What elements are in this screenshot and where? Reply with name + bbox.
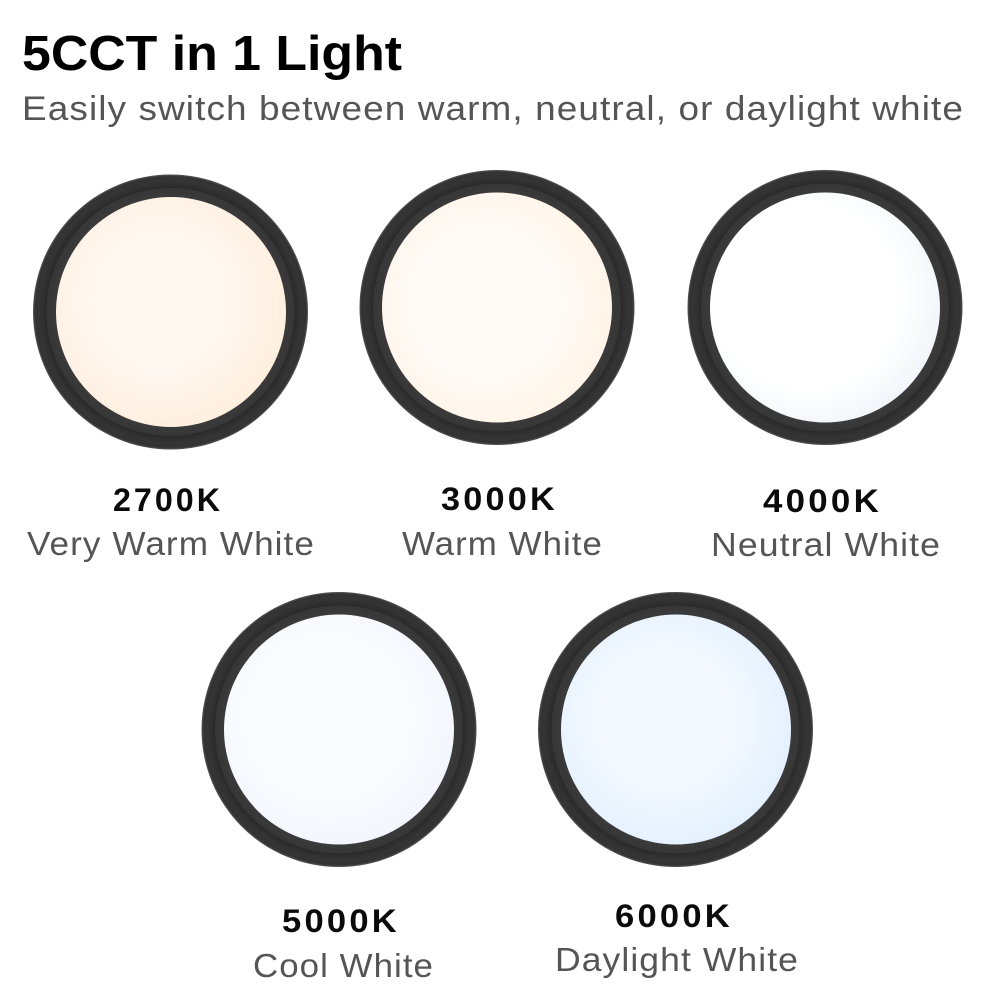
label: Very Warm White: Very Warm White (27, 525, 315, 562)
icon: 3000K fixture (360, 170, 634, 445)
label: Neutral White: Neutral White (711, 526, 941, 563)
label: 5000K: 5000K (282, 903, 400, 939)
subtitle: Easily switch between warm, neutral, or daylight white (22, 90, 964, 128)
label: Cool White: Cool White (253, 947, 434, 984)
icon: 4000K fixture (688, 170, 962, 445)
label: Daylight White: Daylight White (555, 941, 799, 978)
label: 4000K: 4000K (763, 483, 882, 519)
icon: 5000K fixture (202, 592, 476, 867)
panel: 6000K light (538, 592, 813, 978)
panel: 2700K light (27, 174, 315, 562)
label: 3000K: 3000K (441, 481, 558, 517)
icon: 6000K fixture (538, 592, 813, 867)
panel: 5000K light (202, 592, 476, 984)
label: Warm White: Warm White (402, 525, 603, 562)
panel: 3000K light (360, 170, 634, 562)
label: 2700K: 2700K (113, 482, 223, 518)
label: 6000K: 6000K (615, 898, 733, 934)
panel: 4000K light (688, 170, 962, 563)
icon: 2700K fixture (33, 174, 308, 450)
title: 5CCT in 1 Light (22, 27, 402, 81)
